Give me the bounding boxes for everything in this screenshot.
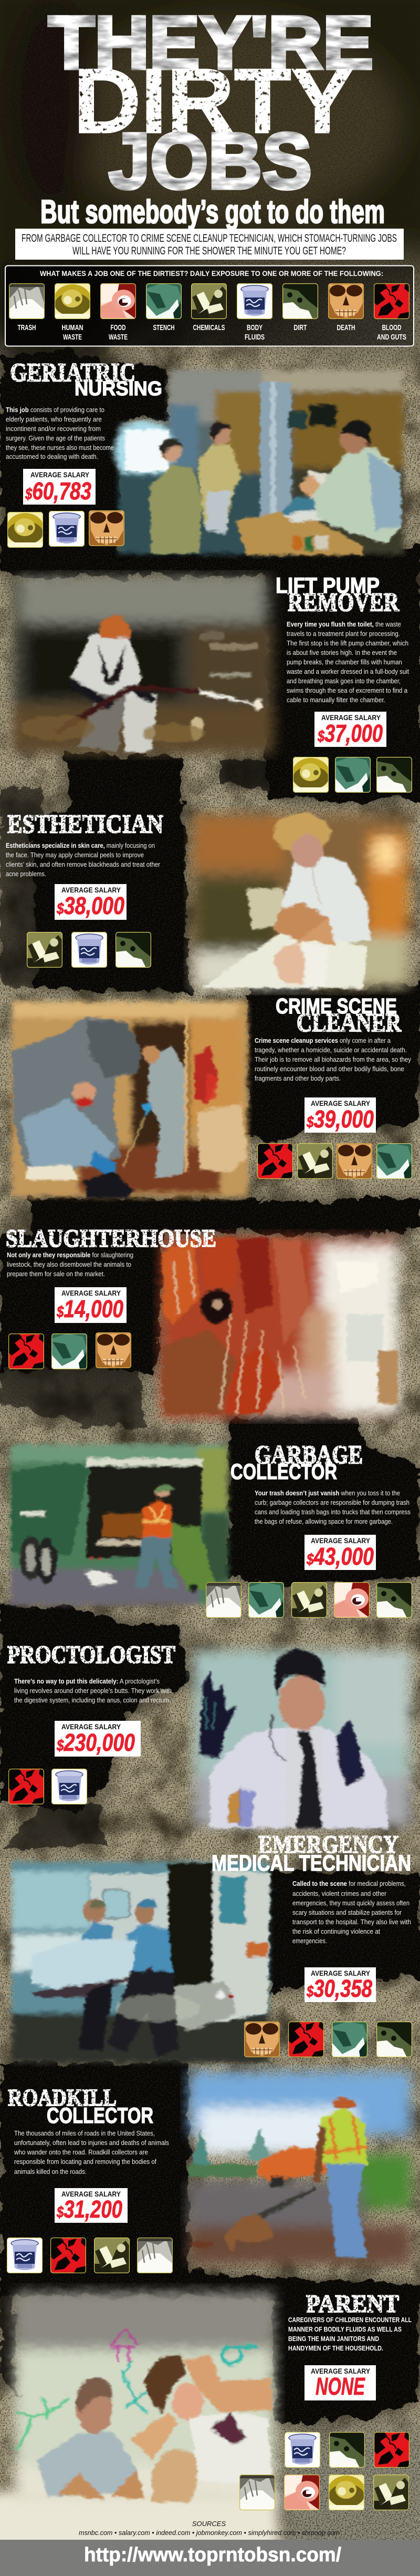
salary box: $43,000 [306, 1543, 374, 1570]
legend: blood and guts: BLOOD [382, 323, 402, 332]
legend: human waste: WASTE [63, 333, 82, 342]
salary box: AVERAGE SALARY [61, 1289, 121, 1297]
description: The thousands of miles of roads in the United States, [14, 2129, 155, 2137]
exposure icons [244, 2021, 412, 2057]
salary box: $31,200 [56, 2195, 122, 2223]
heading: LIFT PUMP [276, 573, 380, 598]
painting: ambulance and stretcher [12, 1862, 270, 2063]
legend: human waste: HUMAN [62, 323, 83, 332]
panel: proctologist [7, 1641, 411, 1828]
heading: COLLECTOR [47, 2103, 153, 2128]
salary box [55, 1721, 141, 1757]
salary box [304, 1097, 376, 1133]
intro box [15, 229, 404, 260]
legend: stench: STENCH [153, 323, 174, 332]
salary box: AVERAGE SALARY [311, 1969, 371, 1977]
description: Called to the scene for medical problems, [292, 1880, 406, 1887]
description [292, 1880, 411, 1945]
heading [230, 1440, 363, 1484]
legend: body fluids: BODY [247, 323, 262, 332]
legend: food waste: FOOD [110, 323, 126, 332]
title word: THEY'RE: THEY'RE [48, 1, 373, 85]
legend: body fluids: FLUIDS [245, 333, 265, 342]
legend: trash [9, 283, 45, 332]
legend: chemicals [191, 283, 227, 332]
sources: SOURCES [192, 2520, 226, 2528]
salary box: AVERAGE SALARY [61, 886, 121, 894]
salary box [55, 884, 127, 920]
legend panel: WHAT MAKES A JOB ONE OF THE DIRTIEST? DAILY EXPOSURE TO ONE OR MORE OF THE FOLLOWING: [40, 269, 383, 278]
legend: stench [146, 283, 182, 332]
description: Estheticians specialize in skin care, mainly focusing on [6, 841, 155, 849]
title word: JOBS: JOBS [109, 117, 312, 205]
painting: doctor with gloves [194, 1649, 411, 1828]
description: the face. They may apply chemical peels to improve [6, 851, 144, 859]
salary box: $37,000 [317, 720, 383, 747]
legend: death: DEATH [337, 323, 355, 332]
description: who wander onto the road. Roadkill collectors are [14, 2148, 148, 2156]
description: There’s no way to put this delicately: A proctologist’s [14, 1677, 160, 1685]
description [14, 2129, 169, 2175]
painting: meat carcasses [162, 1236, 398, 1417]
description: the risk of continuing violence at [292, 1927, 380, 1935]
salary box: NONE [316, 2373, 365, 2400]
salary box [55, 2188, 128, 2223]
salary box: AVERAGE SALARY [321, 713, 381, 722]
description: routinely encounter blood and other bodily fluids, bone [255, 1065, 404, 1073]
title word: DIRTY: DIRTY [74, 49, 353, 152]
exposure icons [257, 1143, 412, 1179]
salary box [304, 1535, 376, 1570]
description: fragments and other body parts. [255, 1074, 341, 1082]
panel: geriatric nursing [6, 357, 403, 555]
salary box: AVERAGE SALARY [311, 2367, 371, 2375]
description: scary situations and stabilize patients for [292, 1908, 402, 1916]
description: transport to the hospital. They also live with [292, 1918, 411, 1926]
heading: ROADKILL [8, 2084, 117, 2111]
salary box: $60,783 [25, 477, 91, 505]
description [255, 1489, 411, 1525]
description: Your trash doesn’t just vanish when you toss it to the [255, 1489, 400, 1497]
description: HANDYMEN OF THE HOUSEHOLD. [288, 2344, 383, 2352]
painting: worker in sewage [13, 577, 274, 753]
description: prepare them for sale on the market. [7, 1270, 105, 1278]
legend: dirt [282, 283, 318, 332]
description: BEING THE MAIN JANITORS AND [288, 2335, 379, 2343]
legend: blood and guts [374, 283, 410, 342]
heading: PROCTOLOGIST [7, 1641, 175, 1669]
heading [276, 994, 402, 1037]
panel: garbage collector [10, 1440, 412, 1618]
description: unfortunately, often lead to injuries and deaths of animals [14, 2139, 169, 2147]
description: cable to manually filter the chamber. [287, 696, 385, 704]
painting: facial treatment [192, 813, 408, 988]
description: animals killed on the roads. [14, 2168, 87, 2175]
footer url bar: http://www.toprntobsn.com/ [84, 2544, 341, 2566]
panel: parent [15, 2290, 412, 2510]
legend: death [328, 283, 364, 332]
salary box: $230,000 [56, 1729, 135, 1756]
panel: esthetician [6, 809, 408, 988]
description: livestock, they also disembowel the animals to [7, 1260, 131, 1268]
salary box: AVERAGE SALARY [30, 470, 90, 479]
description: clients’ skin, and often remove blackheads and treat other [6, 860, 161, 868]
salary box: AVERAGE SALARY [311, 1536, 371, 1545]
painting: hospital room [114, 370, 403, 555]
legend: blood and guts: AND GUTS [377, 333, 406, 342]
heading: SLAUGHTERHOUSE [6, 1225, 216, 1253]
salary box: $30,358 [306, 1975, 372, 2002]
painting: roadside worker [189, 2072, 411, 2264]
description [288, 2316, 412, 2352]
heading: ESTHETICIAN [7, 809, 163, 838]
salary box: $14,000 [56, 1295, 123, 1322]
description: living revolves around other people’s butts. They work with [14, 1687, 172, 1695]
description [255, 1036, 411, 1082]
salary box: AVERAGE SALARY [311, 1099, 371, 1107]
exposure icons [27, 932, 151, 968]
description: accustomed to dealing with death. [6, 453, 98, 460]
description: Not only are they responsible for slaughtering [7, 1251, 133, 1259]
legend: food waste [100, 283, 136, 342]
description: pump breaks, the chamber fills with human [287, 658, 402, 666]
cream wash below parent painting [0, 2491, 278, 2576]
heading [10, 357, 162, 400]
legend: food waste: WASTE [109, 333, 128, 342]
salary box: AVERAGE SALARY [61, 2190, 121, 2198]
sources: msnbc.com • salary.com • indeed.com • jobmonkey.com • simplyhired.com • shmoop.com [79, 2529, 340, 2537]
heading: COLLECTOR [230, 1459, 337, 1484]
legend: chemicals: CHEMICALS [193, 323, 225, 332]
description: Every time you flush the toilet, the waste [287, 620, 401, 628]
panel: slaughterhouse [6, 1225, 398, 1417]
exposure icons [239, 2432, 410, 2510]
description: acne problems. [6, 870, 46, 878]
salary box [23, 469, 96, 505]
description: and breathing mask goes into the chamber, [287, 677, 401, 685]
painting: stressed parents [15, 2292, 275, 2503]
description: incontinent and/or recovering from [6, 425, 101, 433]
description: Crime scene cleanup services only come in after a [255, 1036, 391, 1044]
description: surgery. Given the age of the patients [6, 434, 105, 442]
exposure icons [8, 1332, 131, 1369]
description: they see, these nurses also must become [6, 444, 114, 451]
description: the digestive system, including the anus, colon and rectum. [14, 1696, 171, 1704]
legend: trash: TRASH [18, 323, 36, 332]
description: swims through the sea of excrement to find a [287, 686, 408, 694]
exposure icons [7, 2238, 173, 2273]
painting: garbage truck [10, 1444, 228, 1605]
salary box: $38,000 [56, 892, 124, 919]
description: travels to a treatment plant for processing. [287, 630, 400, 638]
salary box [314, 712, 386, 747]
exposure icons [206, 1582, 412, 1618]
legend: human waste [54, 283, 91, 342]
description [7, 1251, 133, 1278]
heading [276, 573, 400, 617]
panel: emergency medical technician [12, 1831, 412, 2063]
description [286, 620, 409, 704]
description: responsible from locating and removing the bodies of [14, 2158, 156, 2166]
title block [5, 1, 414, 346]
heading [8, 2084, 153, 2128]
description: elderly patients, who frequently are [6, 415, 102, 423]
sources [79, 2520, 340, 2537]
panel: crime scene cleaner [12, 994, 412, 1198]
salary box [304, 2365, 376, 2400]
description [6, 841, 161, 878]
heading: EMERGENCY [258, 1831, 398, 1859]
exposure icons [292, 757, 412, 793]
description: the bags of refuse, allowing space for more garbage. [255, 1517, 393, 1525]
salary box [55, 1287, 127, 1323]
exposure icons [8, 1769, 87, 1804]
description: accidents, violent crimes and other [292, 1890, 387, 1897]
description [14, 1677, 172, 1704]
panel: roadkill collector [7, 2072, 411, 2273]
heading [212, 1831, 411, 1876]
salary box [304, 1967, 376, 2002]
legend: body fluids [237, 283, 272, 342]
description: is about five stories high. In the event the [287, 649, 397, 656]
description: The first stop is the lift pump chamber, which [287, 639, 408, 647]
heading: PARENT [306, 2290, 399, 2318]
description: This job consists of providing care to [6, 406, 104, 414]
description [6, 406, 114, 460]
legend: dirt: DIRT [294, 323, 307, 332]
footer url bar [0, 2540, 420, 2576]
description: emergencies. [292, 1937, 327, 1945]
exposure icons [6, 510, 124, 548]
heading: GARBAGE [255, 1440, 363, 1469]
painting: crime scene [12, 1001, 248, 1198]
salary box: AVERAGE SALARY [61, 1722, 121, 1731]
salary box: $39,000 [306, 1105, 374, 1133]
heading: GERIATRIC [10, 357, 135, 387]
panel: lift pump remover [13, 573, 412, 793]
legend panel [5, 266, 414, 346]
heading: NURSING [75, 378, 162, 400]
